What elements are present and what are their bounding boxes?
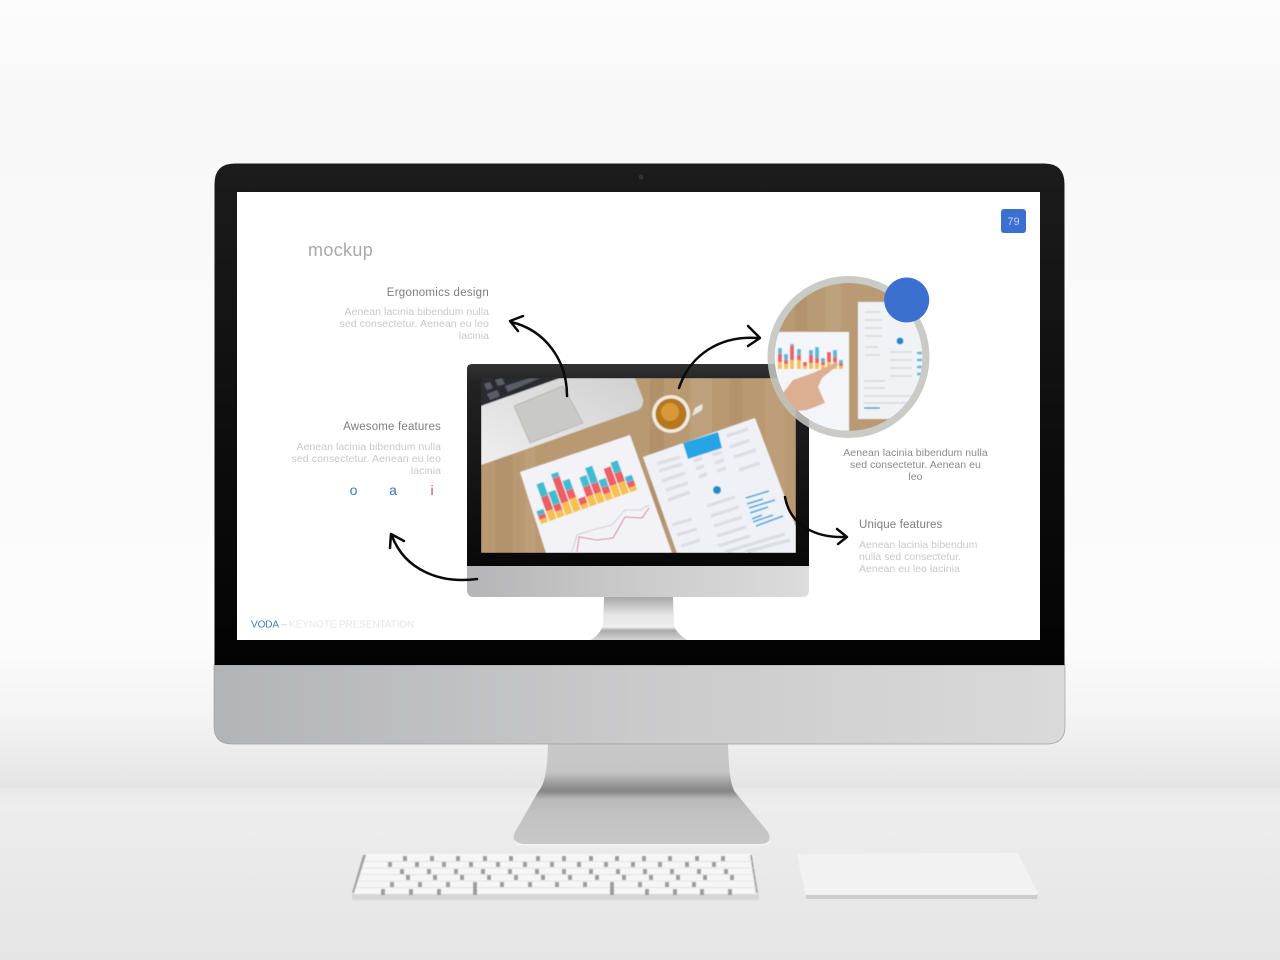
colored letters	[350, 482, 434, 498]
text block: Ergonomics design: Ergonomics design	[387, 287, 489, 299]
monitor body	[214, 164, 1065, 744]
webcam	[638, 174, 644, 180]
text block: Unique features: Aenean lacinia bibendum	[859, 539, 978, 551]
magnified resume paper	[858, 302, 928, 419]
title: mockup	[308, 240, 373, 260]
laptop	[481, 378, 643, 465]
text block: Awesome features: sed consectetur. Aenean eu leo	[291, 453, 441, 465]
text block: Unique features: nulla sed consectetur.	[859, 551, 961, 563]
trackpad	[797, 853, 1038, 899]
arrow: to Unique features	[785, 497, 847, 544]
keyboard	[352, 854, 759, 900]
magnified chart paper	[770, 332, 849, 431]
magnifier circle	[770, 280, 930, 435]
key gaps	[381, 856, 734, 895]
page number badge: 79	[1007, 216, 1020, 228]
text block: Awesome features: Awesome features	[343, 421, 441, 433]
arrow: to magnifier	[679, 326, 760, 388]
colored letters: a	[389, 482, 397, 498]
blue accent circle	[884, 278, 929, 322]
text block: Ergonomics design: Aenean lacinia bibendum nulla	[345, 306, 489, 318]
text block: Unique features: Aenean eu leo lacinia	[859, 563, 960, 575]
monitor chin	[214, 665, 1065, 744]
text block: Ergonomics design: sed consectetur. Aenean eu leo	[339, 318, 489, 330]
footer text: VODA – KEYNOTE PRESENTATION	[251, 620, 414, 630]
desk photo	[481, 378, 796, 553]
text block: magnifier caption: leo	[908, 471, 923, 483]
text block: magnifier caption: sed consectetur. Aenean eu	[850, 459, 981, 471]
background: desk	[0, 788, 1280, 960]
line chart	[572, 505, 649, 552]
chart paper	[520, 435, 672, 553]
arrow: to Awesome features	[390, 534, 477, 580]
magnified wood	[779, 283, 889, 431]
text block: Awesome features: lacinia	[411, 465, 441, 477]
pointing hand	[783, 362, 838, 411]
wood desk	[481, 378, 796, 553]
small monitor chin	[467, 566, 809, 597]
monitor bezel	[214, 164, 1064, 665]
text block: magnifier caption	[843, 447, 988, 483]
small monitor bezel	[467, 364, 809, 566]
text block: Awesome features: Aenean lacinia bibendum nulla	[297, 441, 441, 453]
text block: Ergonomics design	[339, 287, 489, 342]
magnified bars	[778, 344, 843, 369]
text block: Unique features: Unique features	[859, 519, 943, 531]
coffee cup	[652, 395, 703, 433]
monitor stand	[514, 744, 770, 845]
small monitor	[467, 364, 809, 597]
magnifier ring	[771, 280, 926, 434]
text block: Unique features	[859, 519, 978, 575]
text block: Awesome features	[291, 421, 441, 477]
page number badge	[1001, 209, 1026, 233]
slide screen	[237, 192, 1040, 641]
text block: Ergonomics design: lacinia	[459, 330, 489, 342]
small monitor stand	[589, 597, 689, 641]
colored letters: i	[430, 482, 434, 498]
resume paper	[643, 418, 796, 553]
text block: magnifier caption: Aenean lacinia bibendum nulla	[843, 447, 988, 459]
colored letters: o	[350, 482, 358, 498]
arrow: to Ergonomics design	[510, 316, 567, 396]
stacked bars	[536, 460, 638, 525]
